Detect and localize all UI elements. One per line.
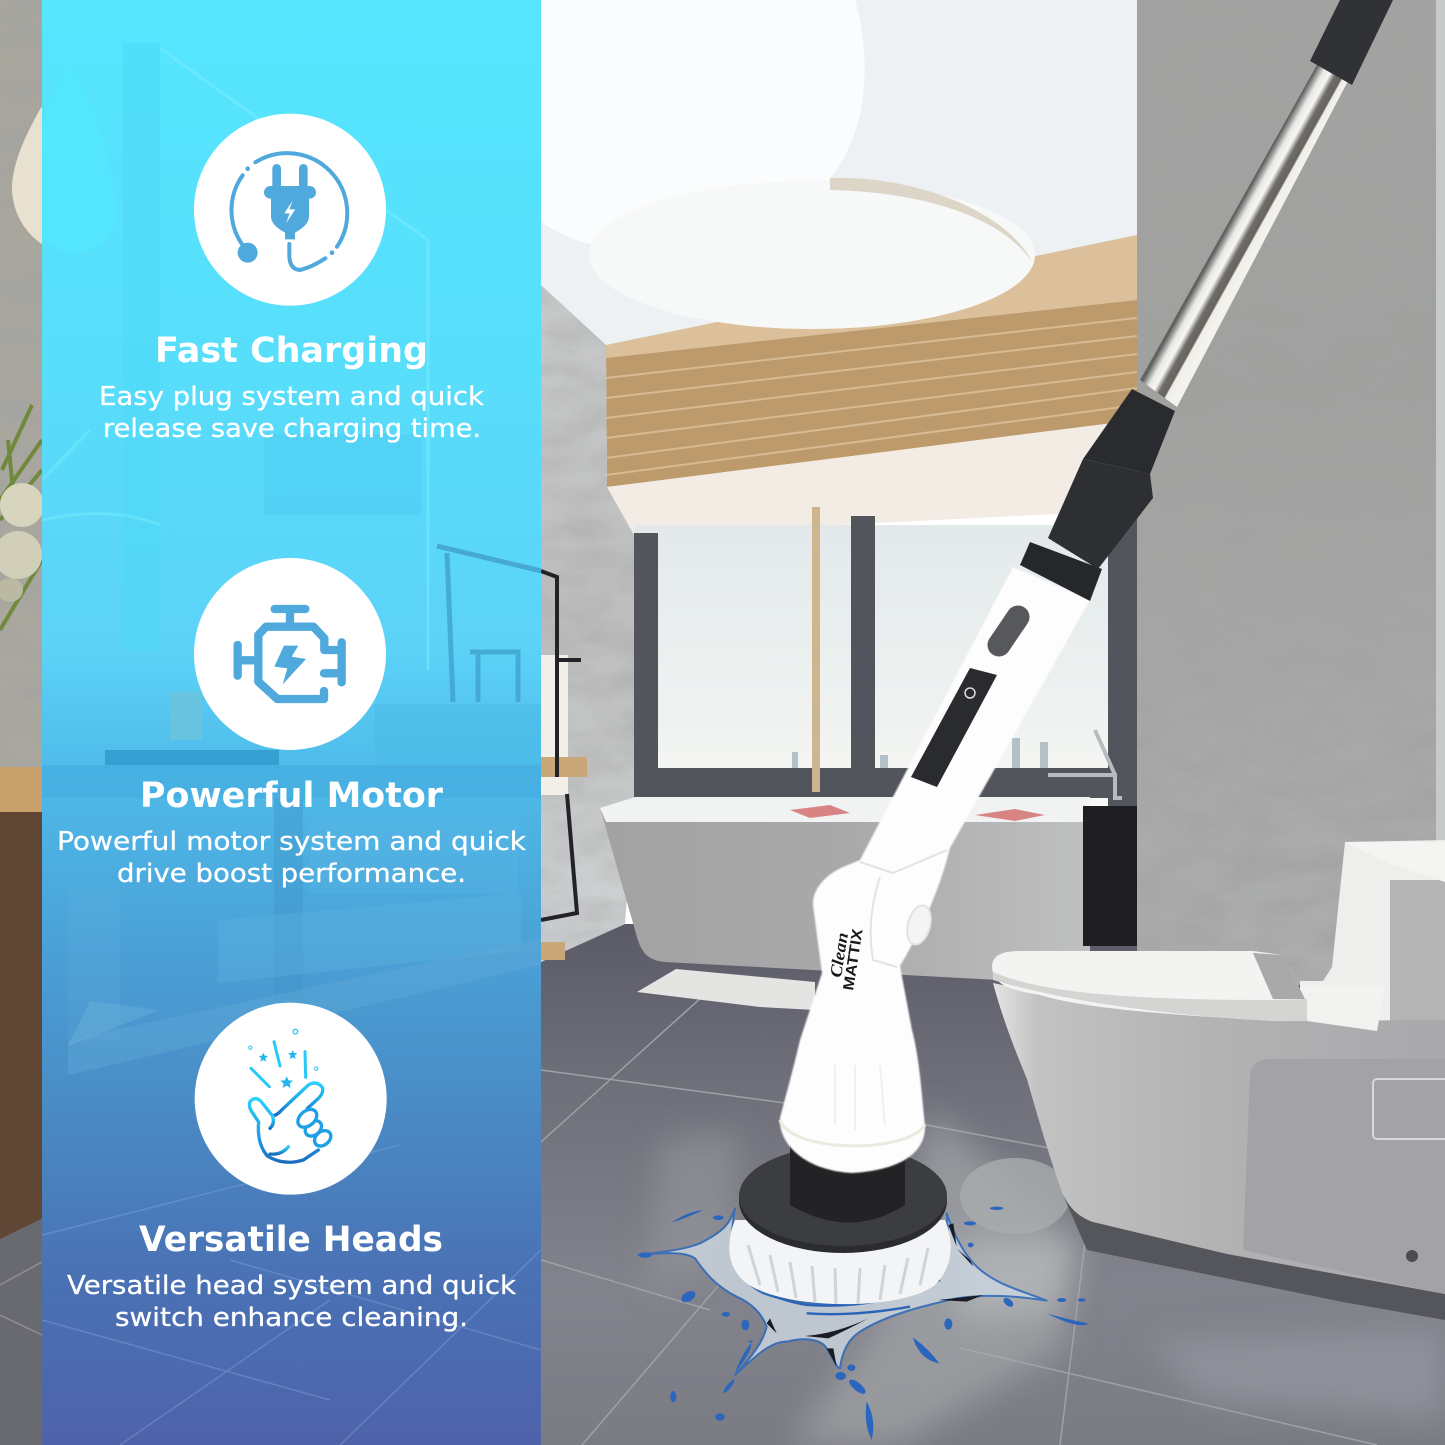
wood slats xyxy=(606,300,1137,487)
brand logo: Clean xyxy=(826,931,852,979)
icon: engine xyxy=(194,558,386,750)
wood pole xyxy=(812,507,820,792)
wood beam top strip xyxy=(606,235,1137,360)
toilet tank grey front xyxy=(1390,880,1445,1050)
pivot button xyxy=(903,903,935,947)
description: switch enhance cleaning. xyxy=(115,1303,468,1333)
brand logo: MATTIX xyxy=(840,928,867,992)
ceiling xyxy=(541,0,1141,360)
ceiling lamp large xyxy=(541,0,865,251)
bathtub xyxy=(600,797,1090,985)
window frames xyxy=(634,510,1137,810)
description: release save charging time. xyxy=(103,414,481,444)
description: Easy plug system and quick xyxy=(99,382,484,412)
power icon xyxy=(965,688,975,698)
toilet seat side xyxy=(993,972,1307,1021)
black grip lower xyxy=(1048,459,1153,569)
head side ribs xyxy=(835,1065,885,1130)
toilet seat lid xyxy=(992,951,1305,1021)
description xyxy=(99,382,484,444)
wooden counter far left xyxy=(0,767,60,1242)
steel pole xyxy=(1140,65,1348,407)
brush bristles xyxy=(729,1220,951,1304)
panel: translucent blue feature column xyxy=(42,0,541,1445)
toilet seat hinge xyxy=(1253,953,1305,999)
black top sleeve xyxy=(1310,0,1393,85)
bowl shadow xyxy=(1063,1195,1445,1320)
toilet xyxy=(992,840,1445,1294)
feature: fast charging xyxy=(99,114,484,444)
description: Powerful motor system and quick xyxy=(57,827,526,857)
towel rack xyxy=(541,571,587,960)
water droplets xyxy=(638,1207,1088,1440)
concrete wall right xyxy=(1137,0,1445,985)
feature: powerful motor xyxy=(57,558,526,889)
toilet upper white rim xyxy=(1300,985,1385,1031)
ceiling lamp small xyxy=(589,178,1035,329)
concrete wall far left xyxy=(0,0,541,790)
floor xyxy=(541,924,1445,1445)
window sky xyxy=(634,525,1137,805)
heading: Versatile Heads xyxy=(139,1220,443,1260)
icon: finger snap xyxy=(195,1003,387,1195)
reflection ellipse near toilet xyxy=(960,1158,1070,1234)
toilet bowl xyxy=(993,983,1445,1294)
plant far left xyxy=(0,405,44,630)
tile floor left xyxy=(0,1205,70,1445)
rug xyxy=(637,969,815,1010)
description: drive boost performance. xyxy=(117,859,466,889)
toilet side panel xyxy=(1373,1079,1445,1139)
bath tap xyxy=(1048,730,1122,798)
white body and head silhouette xyxy=(780,567,1090,1173)
description: Versatile head system and quick xyxy=(67,1271,516,1301)
pendant lamp far left xyxy=(12,64,116,255)
heading: Powerful Motor xyxy=(140,776,444,816)
toilet tank xyxy=(1300,840,1445,1060)
cream soffit xyxy=(607,420,1137,535)
black grip upper xyxy=(1083,389,1175,474)
black collar xyxy=(1020,542,1102,601)
blue water lines xyxy=(740,1273,940,1314)
water splash xyxy=(638,1207,1088,1440)
description xyxy=(67,1271,516,1333)
feature: versatile heads xyxy=(67,1003,516,1333)
black counter xyxy=(1083,806,1137,946)
control panel xyxy=(911,668,997,787)
floor reflections xyxy=(650,1110,1445,1445)
toilet recess xyxy=(1243,1059,1445,1294)
speed switch xyxy=(999,617,1018,645)
concrete side wall xyxy=(541,285,634,962)
collar line xyxy=(780,1120,925,1146)
black disc xyxy=(739,1145,947,1253)
description xyxy=(57,827,526,889)
brand logo xyxy=(826,928,867,992)
product: spin scrubber xyxy=(638,0,1393,1440)
heading: Fast Charging xyxy=(155,331,428,371)
icon: plug xyxy=(194,114,386,306)
dark water highlights xyxy=(767,1223,983,1367)
toilet tank top xyxy=(1345,842,1445,882)
joint seam lines xyxy=(860,850,947,967)
distant skyline xyxy=(792,738,1048,770)
ghosted interior inside panel xyxy=(42,43,541,1445)
toilet base dot xyxy=(1406,1250,1418,1262)
wall edge strip xyxy=(1436,0,1445,842)
